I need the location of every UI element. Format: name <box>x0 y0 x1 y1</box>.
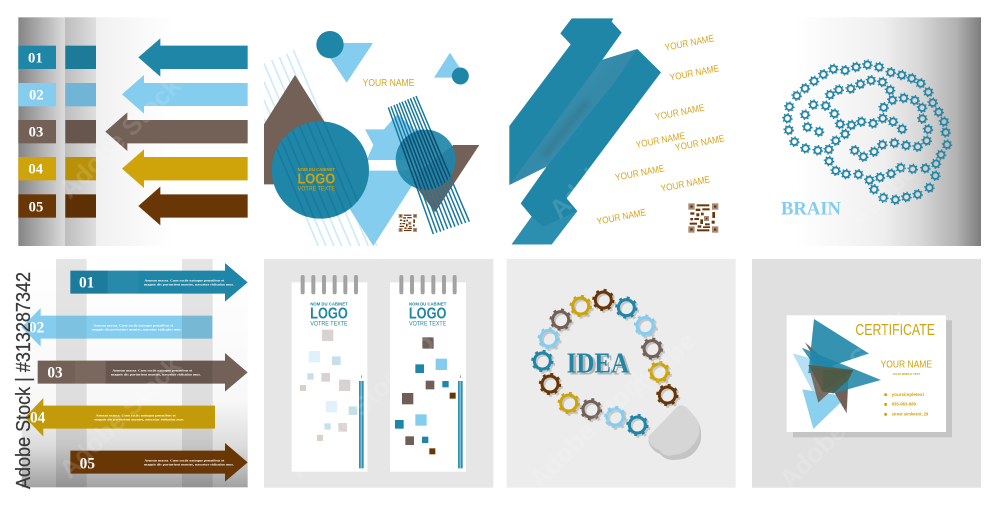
contact list: street simletext, 29 <box>892 412 929 417</box>
row 01: 01 <box>28 50 43 66</box>
your name labels: YOUR NAME <box>674 133 726 154</box>
qr code <box>688 203 718 233</box>
your name labels: YOUR NAME <box>635 131 687 151</box>
small light triangle <box>434 52 460 78</box>
arrow 04 <box>25 398 215 437</box>
small circle <box>452 67 469 84</box>
bulb base <box>648 405 699 456</box>
gears <box>532 290 679 437</box>
arrow 01: magnis dis parturient montes, nascetur ridiculus mus. <box>144 282 234 286</box>
panel: certificate <box>752 259 981 488</box>
brain gears <box>783 60 952 204</box>
row 05 <box>18 187 248 225</box>
arrow 04: magnis dis parturient montes, nascetur ridiculus mus. <box>94 417 184 421</box>
your name labels <box>596 33 726 228</box>
notepad left: NOM DU CABINET <box>310 301 348 306</box>
row 03 <box>18 112 248 151</box>
big blue circle with logo: NOM DU CABINET <box>298 167 335 172</box>
panel: notepads <box>264 259 493 488</box>
panel: idea lightbulb <box>507 259 736 488</box>
your name labels: YOUR NAME <box>664 33 716 54</box>
subtitle: YOUR SIMPLE TEXT <box>892 372 920 376</box>
arrow 03: Aenean massa. Cum sociis natoque penatibus et <box>112 368 193 372</box>
arrow 05 <box>70 443 248 482</box>
row 05: 05 <box>29 199 43 215</box>
ribbon upper <box>509 18 622 185</box>
your name: YOUR NAME <box>363 78 415 89</box>
big light triangle <box>350 170 421 246</box>
watermarks: Adobe Stock <box>53 350 187 484</box>
ribbon tail light <box>512 211 577 244</box>
row 02 <box>18 75 248 114</box>
qr code <box>399 214 417 232</box>
ribbon lower <box>512 49 661 244</box>
contact list: 835-963-889 <box>892 402 917 407</box>
row 02: 02 <box>29 87 44 103</box>
arrow 03: 03 <box>47 365 63 382</box>
arrow 02: magnis dis parturient montes, nascetur ridiculus mus. <box>92 327 182 331</box>
big blue circle with logo: VOTRE TEXTE <box>298 186 335 193</box>
panel: brain of gears <box>735 17 981 246</box>
arrow 04: Aenean massa. Cum sociis natoque penatibus et <box>96 413 177 417</box>
certificate heading: CERTIFICATE <box>855 322 935 339</box>
your name: YOUR NAME <box>881 360 932 371</box>
watermarks: Adobe Stock <box>523 360 657 494</box>
your name labels: YOUR NAME <box>596 207 648 228</box>
notepad right: NOM DU CABINET <box>409 301 447 306</box>
stock id label: Adobe Stock | #313287342 <box>13 272 35 489</box>
brown triangle left <box>264 75 324 184</box>
light star <box>365 114 423 160</box>
watermarks <box>53 70 921 494</box>
notepad right <box>390 275 466 472</box>
bulb base shadow <box>648 408 701 460</box>
idea label: IDEA <box>567 348 629 379</box>
notepad left: LOGO <box>310 305 348 322</box>
pale diagonal stripes <box>264 50 377 246</box>
watermarks: Adobe <box>843 156 921 234</box>
watermarks: Adobe Stock <box>283 350 417 484</box>
watermarks: Stock <box>843 303 915 374</box>
dark stripe overlap <box>400 130 451 190</box>
arrow 01 <box>70 263 248 302</box>
notepad left <box>292 275 367 472</box>
arrow 03: magnis dis parturient montes, nascetur ridiculus mus. <box>111 372 201 376</box>
card shadow <box>793 320 952 437</box>
row 04 <box>18 149 248 188</box>
contact list: yoursimpletext <box>892 392 925 397</box>
notepad right: LOGO <box>409 305 447 322</box>
row 01 <box>18 38 248 77</box>
arrow 05: magnis dis parturient montes, nascetur ridiculus mus. <box>144 463 234 467</box>
arrow 01: 01 <box>79 274 94 291</box>
circle top <box>316 31 344 58</box>
notepad right: VOTRE TEXTE <box>409 320 447 327</box>
panel: folded ribbon <box>509 18 726 244</box>
card <box>787 315 946 432</box>
blue diagonal stripes <box>388 96 469 234</box>
big blue circle with logo <box>272 121 369 219</box>
arrow 05: Aenean massa. Cum sociis natoque penatibus et <box>144 459 225 463</box>
watermarks: Adobe <box>383 306 461 384</box>
contact list <box>884 392 929 417</box>
your name labels: YOUR NAME <box>669 63 721 84</box>
your name labels: YOUR NAME <box>654 103 706 123</box>
arrow 03 <box>38 353 248 392</box>
panel: arrows with text <box>22 259 248 487</box>
your name labels: YOUR NAME <box>660 174 712 195</box>
your name labels: YOUR NAME <box>614 163 666 184</box>
arrow 02: 02 <box>29 320 44 337</box>
arrow 02: Aenean massa. Cum sociis natoque penatibus et <box>93 323 174 327</box>
idea label: IDEA <box>569 350 632 381</box>
brain label: BRAIN <box>781 199 841 220</box>
watermarks: Adobe Stock <box>543 90 677 224</box>
circle right <box>396 130 456 190</box>
arrow 04: 04 <box>30 410 46 427</box>
arrow 05: 05 <box>80 455 95 472</box>
ribbon crease shadow <box>543 102 587 157</box>
row 04: 04 <box>28 162 44 178</box>
big blue circle with logo: LOGO <box>297 171 335 187</box>
triangles <box>793 319 881 429</box>
brown triangle right <box>410 145 479 212</box>
watermarks: Adobe Stock <box>53 70 187 204</box>
watermarks: Adobe Stock <box>773 360 907 494</box>
ribbon crease shading <box>509 49 637 185</box>
watermarks: Adobe <box>623 326 701 404</box>
light triangle top <box>330 43 373 82</box>
panel: numbered arrows left <box>18 17 248 246</box>
arrow 02 <box>22 308 212 347</box>
notepad left: VOTRE TEXTE <box>310 320 348 327</box>
row 03: 03 <box>29 125 43 141</box>
arrow 01: Aenean massa. Cum sociis natoque penatibus et <box>144 278 225 282</box>
panel: geometric logo poster <box>247 31 479 246</box>
vertical bands <box>56 259 87 487</box>
